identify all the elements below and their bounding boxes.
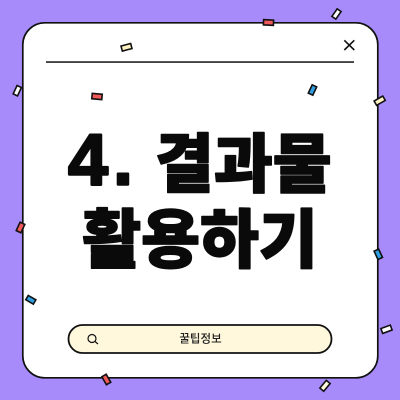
panel: window card — [23, 23, 378, 378]
title line 1: 4. — [68, 120, 153, 200]
title — [68, 120, 332, 276]
search bar label: 꿀팁정보 — [179, 330, 222, 346]
icon: close X — [344, 40, 354, 50]
search bar — [68, 325, 332, 353]
title line 2: 활용하기 — [82, 204, 318, 276]
title line 1: 결과물 — [155, 129, 332, 201]
search bar pill — [68, 325, 332, 353]
icon: magnifier — [88, 334, 98, 344]
header divider — [46, 61, 354, 63]
